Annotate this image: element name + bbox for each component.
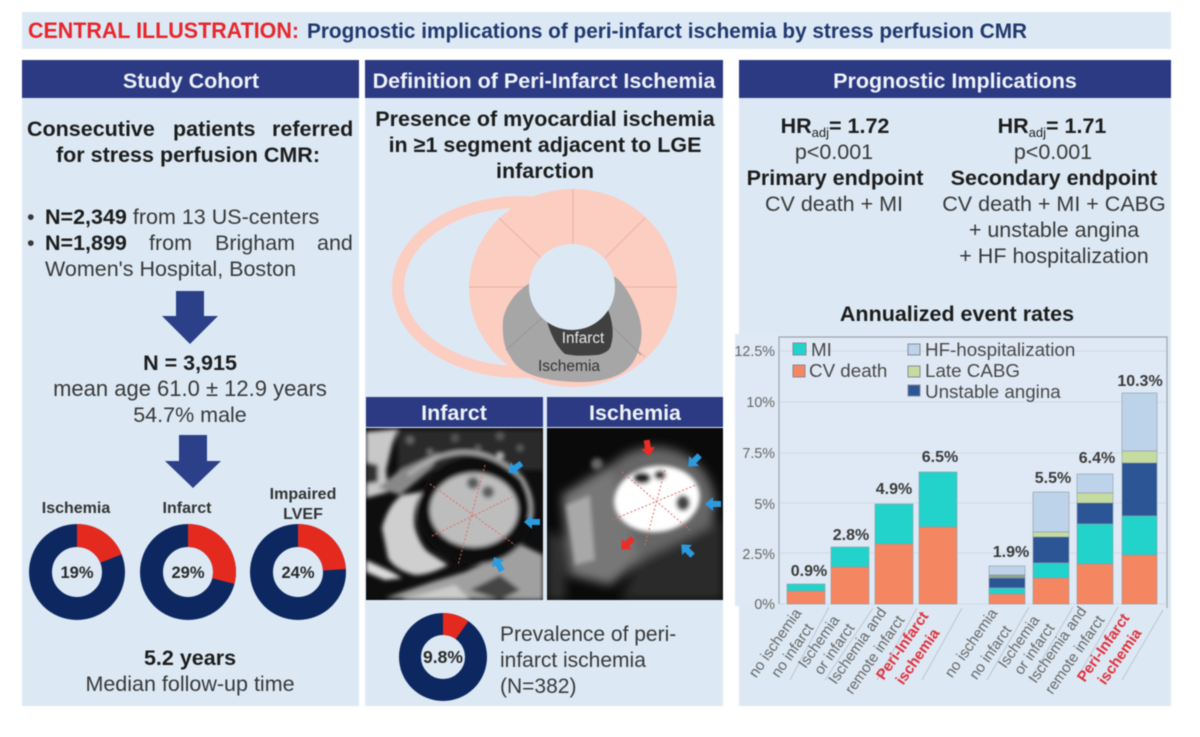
text block: N = 3,915: mean age 61.0 ± 12.9 years [53, 376, 327, 401]
donut: prevalence [410, 624, 476, 690]
donut: ischemia: Ischemia [42, 500, 110, 517]
text block: cohort sources: N=2,349 from 13 US-centers [45, 205, 319, 229]
text block: secondary endpoint: CV death + MI + CABG [942, 192, 1166, 216]
text block: definition: Presence of myocardial ischemia [375, 107, 716, 131]
bar value labels: 10.3% [1117, 373, 1163, 390]
text block: prevalence: (N=382) [500, 675, 576, 698]
label: infarct: Infarct [562, 330, 605, 347]
x axis labels: secondary endpoint: ischemia [1095, 625, 1146, 688]
text block: secondary endpoint: + HF hospitalization [959, 244, 1149, 268]
x axis labels: secondary endpoint: remote infarct [1042, 612, 1109, 697]
image: stress perfusion CMR [547, 428, 723, 600]
text block: cohort sources [27, 205, 353, 281]
legend: Late CABG [925, 360, 1020, 381]
text block: cohort sources: Women's Hospital, Boston [45, 257, 296, 281]
bar value labels: 6.4% [1079, 450, 1115, 467]
donut: impaired LVEF [262, 486, 336, 608]
legend: MI [811, 339, 832, 360]
arrow: down [162, 291, 218, 344]
arrows: ischemia markers [616, 439, 721, 561]
text block: consecutive patients: for stress perfusion CMR: [56, 143, 320, 167]
text block: primary endpoint [747, 114, 923, 216]
text block: primary endpoint: adj [812, 125, 829, 140]
bar value labels: 4.9% [876, 481, 912, 498]
x axis brackets [790, 607, 1163, 680]
bar value labels [791, 373, 1163, 580]
x axis labels: secondary endpoint: no infarct [966, 622, 1016, 683]
text block: prevalence: Prevalence of peri- [500, 623, 676, 646]
x axis labels: secondary endpoint [941, 604, 1146, 697]
x axis labels: secondary endpoint: Ischemia [995, 612, 1044, 671]
text block: follow-up [85, 646, 295, 696]
heading: infarct image [366, 397, 543, 427]
bar value labels: 2.8% [833, 527, 869, 544]
title banner [22, 12, 1171, 49]
bar value labels: 0.9% [791, 563, 827, 580]
x axis labels: primary endpoint: Peri-Infarct [873, 609, 932, 683]
text block: consecutive patients [27, 117, 353, 167]
chart title: Annualized event rates [840, 302, 1074, 326]
heading: infarct image: Infarct [421, 401, 487, 425]
heading: ischemia image [547, 397, 723, 427]
panel: prognostic implications [734, 60, 1171, 706]
y axis labels: 2.5% [742, 547, 775, 563]
heading: study cohort [22, 60, 359, 98]
heading: ischemia image: Ischemia [589, 401, 682, 425]
panel: definition of peri-infarct ischemia [365, 60, 723, 706]
text block: cohort sources: • [27, 205, 35, 229]
text block: secondary endpoint: adj [1029, 125, 1046, 140]
bar value labels: 1.9% [993, 544, 1029, 561]
y axis labels: 12.5% [734, 344, 775, 360]
x axis labels: primary endpoint: Ischemia [795, 612, 844, 671]
donut: ischemia [40, 500, 114, 608]
arrow: down [165, 435, 221, 488]
text block: N = 3,915 [53, 351, 327, 427]
text block: N = 3,915: 54.7% male [133, 403, 247, 427]
x axis labels: primary endpoint: or infarct [811, 620, 859, 678]
donut: impaired LVEF: LVEF [283, 506, 323, 523]
donut: prevalence: 9.8% [423, 647, 463, 667]
heading: definition: Definition of Peri-Infarct Ischemia [373, 69, 716, 93]
y axis labels: 0% [754, 597, 775, 613]
text block: cohort sources: N=1,899 [45, 231, 127, 255]
legend: HF-hospitalization [925, 339, 1075, 360]
x axis labels: secondary endpoint: Ischemia and [1025, 604, 1090, 686]
x axis labels: secondary endpoint: no ischemia [941, 605, 1002, 681]
title banner: CENTRAL ILLUSTRATION: [28, 18, 299, 43]
donut: infarct: 29% [171, 564, 205, 582]
heading: definition [365, 60, 723, 98]
text block: follow-up: Median follow-up time [85, 672, 295, 696]
bar value labels: 6.5% [922, 449, 958, 466]
heading: prognostic implications: Prognostic Implications [833, 69, 1077, 93]
donut: infarct [152, 500, 224, 608]
text block: definition: infarction [496, 159, 594, 183]
label: ischemia: Ischemia [538, 358, 600, 375]
arrows: infarct markers [488, 458, 540, 574]
x axis labels: secondary endpoint: Peri-Infarct [1074, 611, 1133, 685]
text block: definition: in ≥1 segment adjacent to LGE [389, 133, 701, 157]
donut: impaired LVEF: Impaired [270, 486, 336, 503]
x axis labels: primary endpoint: remote infarct [842, 612, 909, 697]
legend [793, 339, 1075, 402]
text block: secondary endpoint: Secondary endpoint [951, 166, 1157, 190]
legend: CV death [809, 360, 887, 381]
y axis labels: 10% [746, 395, 775, 411]
x axis labels: primary endpoint: no ischemia [745, 605, 806, 681]
x axis labels: primary endpoint: ischemia [893, 625, 944, 688]
text block: cohort sources: from [149, 231, 192, 255]
text block: N = 3,915: N = 3,915 [143, 351, 237, 375]
bars: secondary endpoint [989, 393, 1157, 604]
image: LGE infarct CMR [366, 428, 543, 600]
text block: primary endpoint: HR [781, 114, 812, 138]
legend: Unstable angina [925, 381, 1061, 402]
text block: secondary endpoint: + unstable angina [969, 218, 1139, 242]
x axis labels: secondary endpoint: or infarct [1011, 620, 1059, 678]
heading: study cohort: Study Cohort [123, 69, 259, 93]
heading: prognostic implications [739, 60, 1171, 98]
text block: consecutive patients: referred [272, 117, 353, 141]
bars: primary endpoint [787, 472, 957, 604]
text block: secondary endpoint [942, 114, 1166, 268]
text block: definition [375, 107, 716, 183]
y axis labels: 7.5% [742, 446, 775, 462]
text block: cohort sources: • [27, 231, 35, 255]
donut: infarct: Infarct [163, 500, 212, 517]
text block: prevalence: infarct ischemia [500, 649, 646, 672]
x axis labels: primary endpoint: no infarct [768, 620, 818, 681]
title banner: Prognostic implications of peri-infarct ischemia by stress perfusion CMR [307, 20, 1027, 43]
x axis labels: primary endpoint: Ischemia and [825, 605, 890, 687]
text block: cohort sources: Brigham [215, 231, 295, 255]
text block: secondary endpoint: HR [998, 114, 1029, 138]
text block: primary endpoint: Primary endpoint [747, 166, 923, 190]
y axis labels: 5% [754, 497, 775, 513]
text block: primary endpoint: = 1.72 [829, 114, 889, 138]
bar value labels: 5.5% [1035, 470, 1071, 487]
donut: impaired LVEF: 24% [281, 564, 315, 582]
text block: cohort sources: and [317, 231, 353, 255]
text block: primary endpoint: CV death + MI [765, 192, 903, 216]
text block: primary endpoint: p<0.001 [795, 140, 873, 164]
panel: study cohort [22, 60, 359, 706]
diagram: heart cross-section [398, 189, 677, 387]
text block: secondary endpoint: = 1.71 [1046, 114, 1106, 138]
donut: ischemia: 19% [60, 564, 94, 582]
text block: follow-up: 5.2 years [144, 646, 236, 670]
y axis labels [734, 344, 775, 613]
text block: consecutive patients: patients [173, 117, 255, 141]
text block: consecutive patients: Consecutive [27, 117, 155, 141]
text block: secondary endpoint: p<0.001 [1014, 140, 1092, 164]
bar chart: annualized event rates [734, 334, 1171, 697]
text block: prevalence [500, 623, 676, 698]
x axis labels: primary endpoint [745, 605, 944, 697]
